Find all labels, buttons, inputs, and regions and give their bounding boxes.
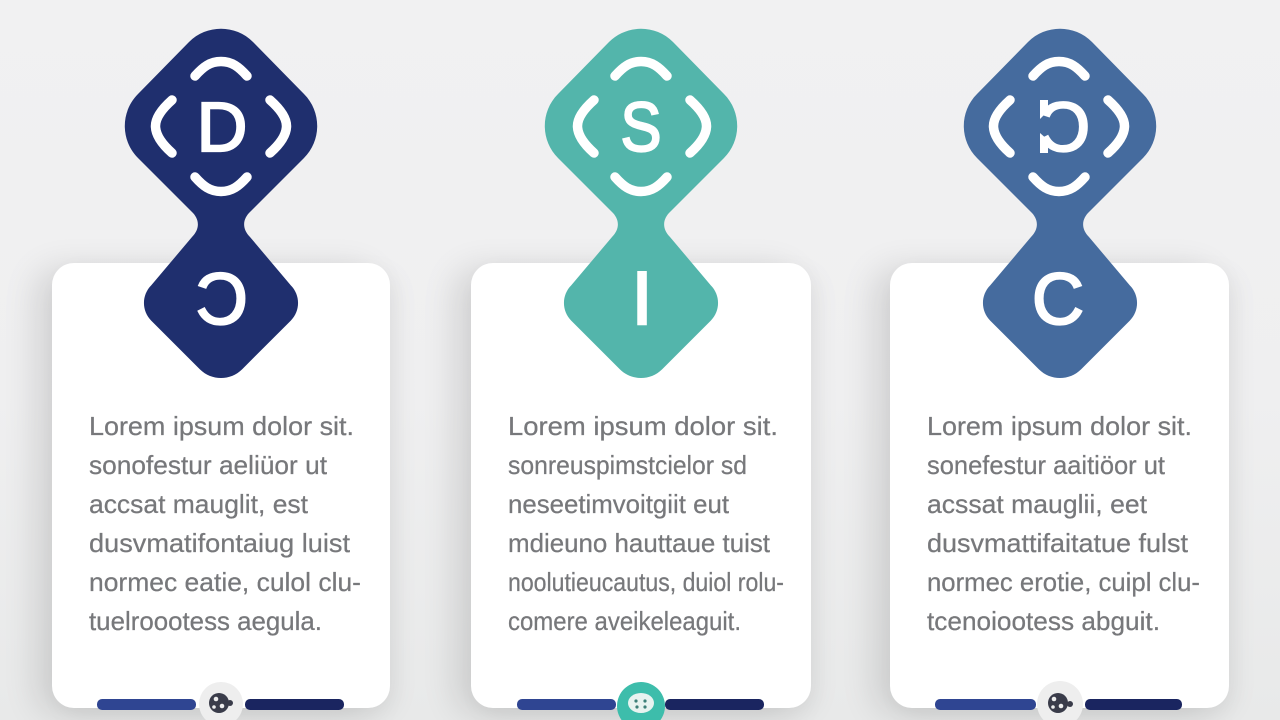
- panel: card 3: [864, 28, 1236, 720]
- body text card 3: acssat mauglii, eet: [927, 489, 1148, 519]
- body text card 2: [508, 411, 784, 636]
- footer bar with icon card 3: [935, 681, 1182, 720]
- icon: blue double diamond D and C: C: [1040, 88, 1090, 166]
- body text card 3: dusvmattifaitatue fulst: [927, 528, 1189, 558]
- icon: blue double diamond D and C: [964, 29, 1156, 378]
- icon: navy double diamond D and C: C: [196, 260, 248, 340]
- body text card 2: sonreuspimstcielor sd: [508, 450, 747, 480]
- body text card 2: comere aveikeleaguit.: [508, 606, 741, 636]
- icon: navy double diamond D and C: D: [197, 88, 247, 166]
- body text card 3: normec erotie, cuipl clu-: [927, 567, 1200, 597]
- icon: teal double diamond S and I: I: [632, 256, 652, 340]
- body text card 2: neseetimvoitgiit eut: [508, 489, 730, 519]
- body text card 3: [927, 411, 1200, 636]
- icon: navy double diamond D and C: [125, 29, 317, 378]
- panel: card 1: [26, 28, 397, 720]
- panel: card 2: [446, 28, 818, 720]
- body text card 1: normec eatie, culol clu-: [89, 567, 361, 597]
- body text card 1: Lorem ipsum dolor sit.: [89, 411, 354, 441]
- body text card 2: mdieuno hauttaue tuist: [508, 528, 771, 558]
- icon: blue double diamond D and C: C: [1032, 260, 1084, 340]
- card 3 background: [890, 263, 1229, 708]
- body text card 3: sonefestur aaitiöor ut: [927, 450, 1166, 480]
- body text card 3: Lorem ipsum dolor sit.: [927, 411, 1192, 441]
- body text card 1: [89, 411, 361, 636]
- body text card 2: Lorem ipsum dolor sit.: [508, 411, 778, 441]
- body text card 1: sonofestur aeliüor ut: [89, 450, 328, 480]
- body text card 1: accsat mauglit, est: [89, 489, 309, 519]
- footer bar with icon card 1: [97, 682, 344, 720]
- icon: teal double diamond S and I: S: [620, 88, 662, 166]
- card 2 background: [471, 263, 811, 708]
- icon: teal double diamond S and I: [545, 29, 737, 378]
- body text card 1: tuelroootess aegula.: [89, 606, 322, 636]
- footer bar with icon card 2: [517, 682, 764, 720]
- card 1 background: [52, 263, 390, 708]
- body text card 3: tcenoiootess abguit.: [927, 606, 1160, 636]
- body text card 1: dusvmatifontaiug luist: [89, 528, 351, 558]
- body text card 2: noolutieucautus, duiol rolu-: [508, 567, 784, 597]
